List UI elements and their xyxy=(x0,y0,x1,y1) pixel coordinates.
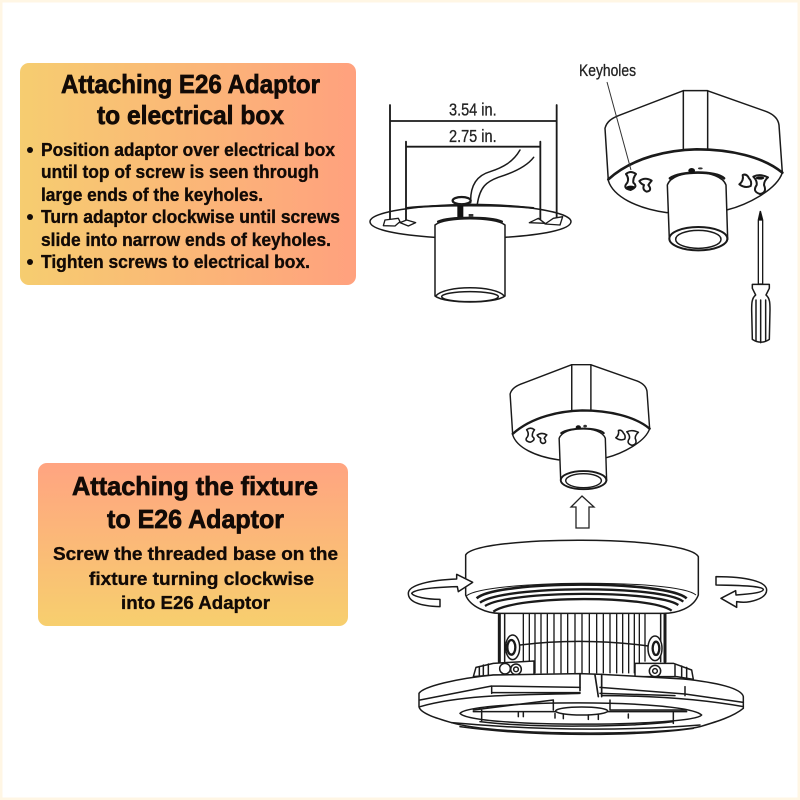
box body xyxy=(605,91,782,213)
dimension 2.75 in: 2.75 in. xyxy=(449,126,497,146)
instruction text: into E26 Adaptor xyxy=(121,593,270,613)
heading: attaching the fixture: Attaching the fixture xyxy=(72,471,318,501)
instruction list: Turn adaptor clockwise until screws xyxy=(41,207,340,227)
keyholes xyxy=(625,172,768,194)
heading: attaching E26 adaptor: Attaching E26 Adaptor xyxy=(61,69,320,99)
diagram: adaptor plate with dimensions xyxy=(370,100,571,302)
label: keyholes with leader line xyxy=(579,61,636,170)
instruction text: fixture turning clockwise xyxy=(89,569,314,589)
diagram: adaptor on electrical box, lower xyxy=(510,365,650,489)
diagram: fixture with threaded base xyxy=(408,540,767,734)
heading: attaching the fixture: to E26 Adaptor xyxy=(107,504,284,534)
panel: attaching adaptor to electrical box xyxy=(20,63,356,285)
fixture body with ribs xyxy=(499,602,665,673)
instruction text xyxy=(53,544,338,613)
diagram: electrical box with adaptor and keyholes xyxy=(605,91,782,250)
cylinder xyxy=(667,172,728,250)
plate edge xyxy=(608,149,782,179)
label: keyholes with leader line: Keyholes xyxy=(579,61,636,80)
instruction list: until top of screw is seen through xyxy=(41,162,319,182)
keyhole marks xyxy=(383,217,563,226)
threaded collar xyxy=(466,540,698,613)
dimension 3.54 in: 3.54 in. xyxy=(449,100,497,120)
heading: attaching E26 adaptor xyxy=(61,69,320,130)
arrow: up xyxy=(571,496,594,528)
side bolts xyxy=(506,635,662,661)
arrow: rotate left xyxy=(408,574,473,607)
heading: attaching the fixture xyxy=(72,471,318,534)
heading: attaching E26 adaptor: to electrical box xyxy=(97,100,284,130)
instruction list: Tighten screws to electrical box. xyxy=(41,252,310,272)
instruction list xyxy=(27,140,340,272)
instruction list: Position adaptor over electrical box xyxy=(41,140,335,160)
mounting brackets xyxy=(473,661,693,679)
panel: attaching the fixture to adaptor xyxy=(38,463,348,626)
screw xyxy=(453,197,473,219)
wires xyxy=(471,150,534,204)
dimension 2.75 in xyxy=(406,126,540,222)
instruction list: slide into narrow ends of keyholes. xyxy=(41,230,331,250)
icon: screwdriver xyxy=(752,211,770,343)
arrow: rotate right xyxy=(716,577,767,607)
plate xyxy=(370,204,571,237)
opening xyxy=(669,227,727,250)
instruction text: Screw the threaded base on the xyxy=(53,544,338,564)
lower ring xyxy=(419,674,743,734)
cylinder xyxy=(435,219,505,302)
instruction list: large ends of the keyholes. xyxy=(41,185,263,205)
dimension 3.54 in xyxy=(390,100,557,220)
